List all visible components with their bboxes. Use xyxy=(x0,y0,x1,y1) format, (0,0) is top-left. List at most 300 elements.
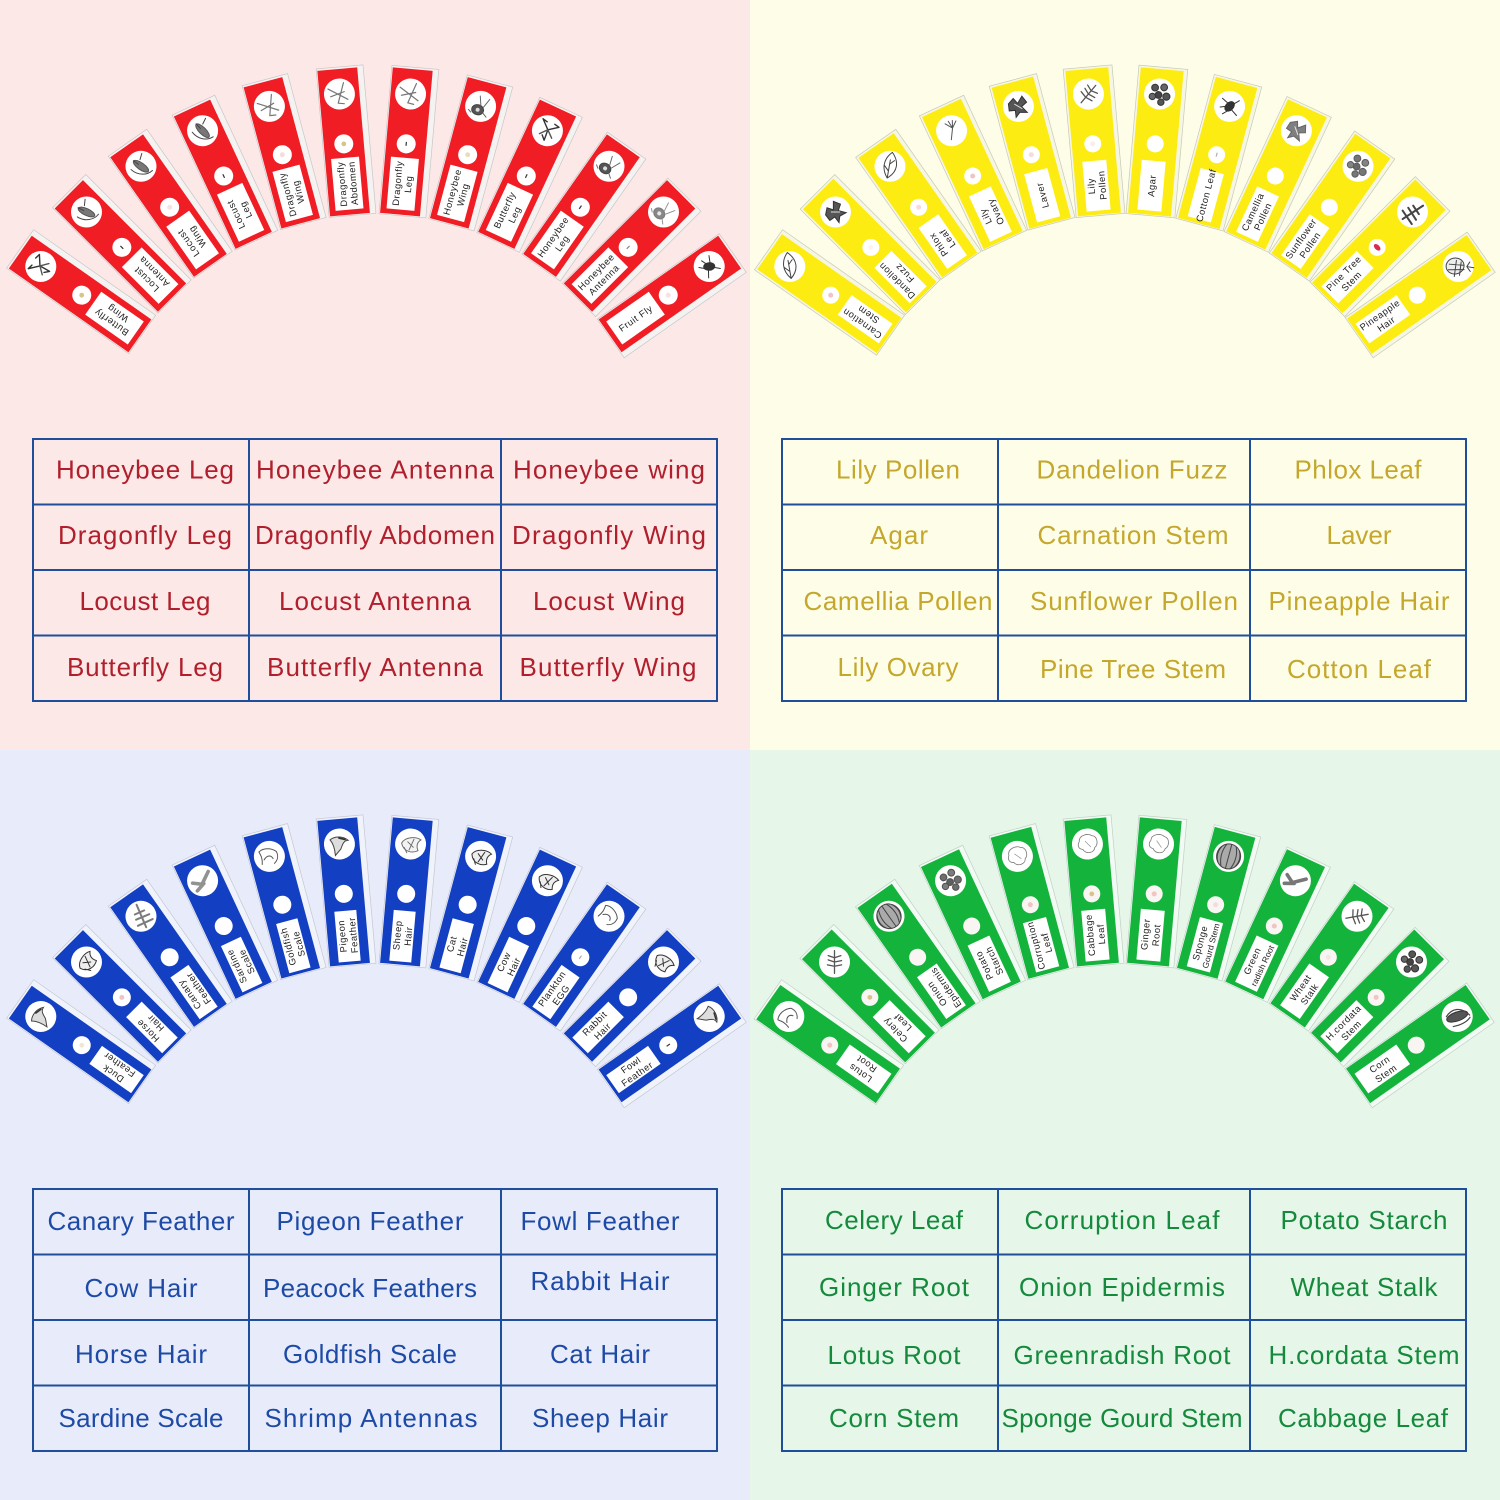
label xyxy=(1323,1002,1371,1050)
specimen xyxy=(579,206,581,209)
slide: Sponge Gourd Stem xyxy=(1176,825,1261,981)
slide: Butterfly Wing xyxy=(7,230,156,354)
table: plant specimens xyxy=(782,439,1466,701)
label: radish Root xyxy=(1249,943,1276,988)
table: insect specimens: Dragonfly Abdomen xyxy=(255,520,495,550)
table: insect specimens: Butterfly Leg xyxy=(67,652,223,682)
label xyxy=(1283,216,1328,267)
table: plant specimens: Carnation Stem xyxy=(1038,520,1228,550)
label xyxy=(1287,972,1322,1009)
label: Camellia xyxy=(1239,191,1266,233)
slide: Canary Feather xyxy=(108,879,232,1028)
slide: Laver xyxy=(989,74,1075,230)
label: Feather xyxy=(619,1059,655,1089)
label: Locust xyxy=(175,227,201,259)
panel: animals (blue) xyxy=(0,750,750,1500)
specimen xyxy=(867,244,874,251)
icon: radish xyxy=(1283,871,1306,891)
label: Wing xyxy=(186,224,208,250)
label: Pollen xyxy=(1251,201,1274,232)
label: Corn xyxy=(1367,1053,1392,1075)
label xyxy=(390,160,416,207)
label: Leaf xyxy=(892,1011,914,1034)
table: animal specimens: Cow Hair xyxy=(84,1273,198,1303)
label xyxy=(973,945,1005,982)
label: Honeybee xyxy=(441,168,463,216)
slide: Agar xyxy=(1126,65,1188,218)
specimen xyxy=(969,173,976,179)
icon: honeybee xyxy=(468,94,491,117)
slide: Duck Feather xyxy=(7,980,156,1104)
table: plant specimens: Sunflower Pollen xyxy=(1030,586,1238,616)
table: vegetable specimens: Onion Epidermis xyxy=(1019,1272,1225,1302)
panel: plants (yellow) xyxy=(750,0,1500,750)
specimen xyxy=(78,292,85,299)
slide: Sheep Hair xyxy=(379,815,439,968)
table: plant specimens: Lily Pollen xyxy=(836,454,960,484)
table: plant specimens: Phlox Leaf xyxy=(1294,454,1422,484)
label: Butterfly xyxy=(491,190,518,230)
slide: Wheat Stalk xyxy=(1269,882,1394,1031)
slide: Fowl Feather xyxy=(597,984,746,1108)
table: vegetable specimens: Sponge Gourd Stem xyxy=(1002,1403,1242,1433)
slide: Cabbage Leaf xyxy=(1063,815,1124,968)
table: animal specimens: Sardine Scale xyxy=(58,1403,224,1433)
label: Pollen xyxy=(1095,170,1109,200)
icon: wheat xyxy=(1346,904,1370,928)
table: insect specimens xyxy=(33,439,717,701)
icon: dragonfly xyxy=(399,82,419,105)
slide: Lily Ovary xyxy=(919,95,1027,251)
label xyxy=(92,298,137,338)
slide: Cotton Leaf xyxy=(1176,74,1262,231)
slide: Lily Pollen xyxy=(1063,65,1125,218)
label: Stalk xyxy=(1298,981,1321,1007)
slide: Cow Hair xyxy=(477,847,582,1002)
specimen xyxy=(118,994,125,1001)
label: Cabbage xyxy=(1083,914,1097,957)
label xyxy=(1357,297,1408,342)
table: plant specimens: Lily Ovary xyxy=(838,652,958,682)
icon: duck xyxy=(30,1005,55,1030)
specimen xyxy=(465,152,471,158)
slide: Onion Epidermis xyxy=(855,879,980,1029)
specimen xyxy=(223,174,225,178)
table: animal specimens: Canary Feather xyxy=(48,1206,235,1236)
table: insect specimens: Locust Wing xyxy=(533,586,685,616)
label: Cow xyxy=(494,950,513,973)
label xyxy=(390,920,415,952)
label: Sheep xyxy=(390,920,404,951)
label: Gourd Stem xyxy=(1200,922,1222,969)
specimen xyxy=(341,141,346,146)
table: insect specimens: Honeybee wing xyxy=(513,454,705,484)
label: Sardine xyxy=(224,948,249,985)
specimen xyxy=(1090,141,1096,147)
label: Honeybee xyxy=(535,214,571,259)
icon: corn xyxy=(1443,1004,1472,1031)
label: Dragonfly xyxy=(334,161,349,207)
table: vegetable specimens: Celery Leaf xyxy=(825,1205,964,1235)
table: plant specimens: Pine Tree Stem xyxy=(1040,654,1226,684)
slide: Pigeon Feather xyxy=(316,815,376,967)
label: Antenna xyxy=(586,262,622,297)
specimen xyxy=(1216,153,1217,157)
icon: carnation xyxy=(776,253,802,278)
label xyxy=(975,197,1006,231)
table: vegetable specimens: Greenradish Root xyxy=(1014,1340,1231,1370)
label: Pigeon xyxy=(335,920,349,953)
table: plant specimens: Laver xyxy=(1326,520,1392,550)
icon: goldfish xyxy=(259,846,279,866)
icon: sheep xyxy=(401,837,421,854)
slide: Honeybee Antenna xyxy=(562,178,701,317)
label xyxy=(880,1008,917,1045)
label: Hair xyxy=(1375,314,1397,334)
table: plant specimens: Cotton Leaf xyxy=(1287,654,1432,684)
label: Root xyxy=(1150,924,1163,947)
label xyxy=(175,221,210,259)
icon: dragonfly xyxy=(328,82,348,105)
specimen xyxy=(665,292,672,299)
icon: camellia xyxy=(1283,118,1308,144)
table: insect specimens: Locust Antenna xyxy=(279,586,472,616)
specimen xyxy=(826,1042,833,1049)
icon: leaf xyxy=(1006,845,1029,867)
label: Potato xyxy=(973,949,995,982)
slide: Dragonfly Leg xyxy=(379,65,439,218)
label: Fruit Fly xyxy=(616,302,655,334)
label: Leg xyxy=(552,233,571,253)
table: vegetable specimens: Lotus Root xyxy=(828,1340,961,1370)
icon: phlox xyxy=(877,152,903,178)
specimen xyxy=(1373,243,1382,252)
label: Lotus xyxy=(846,1061,874,1085)
icon: pineapple xyxy=(1439,249,1474,283)
table: insect specimens: Butterfly Wing xyxy=(520,652,696,682)
label: Stem xyxy=(1339,1018,1363,1043)
specimen xyxy=(166,204,173,211)
label xyxy=(134,1009,169,1045)
table: insect specimens: Honeybee Antenna xyxy=(256,454,495,484)
table: plant specimens: Pineapple Hair xyxy=(1268,586,1450,616)
panel: insects (red) xyxy=(0,0,750,750)
label: Plankton xyxy=(536,969,568,1008)
label xyxy=(491,190,528,235)
label xyxy=(1083,913,1108,957)
icon: honeybee xyxy=(595,152,621,178)
icon: ginger xyxy=(1149,834,1169,854)
slide: Honeybee Leg xyxy=(522,132,646,281)
icon: horse xyxy=(75,950,100,975)
table: animal specimens: Goldfish Scale xyxy=(283,1339,457,1369)
label xyxy=(1324,253,1371,301)
label xyxy=(224,943,259,985)
label xyxy=(1138,918,1163,951)
label: Leaf xyxy=(1094,924,1107,945)
slide: Carnation Stem xyxy=(754,230,905,355)
label: Antenna xyxy=(136,254,172,289)
slide: Dragonfly Abdomen xyxy=(316,65,376,217)
label: Corruption xyxy=(1024,921,1047,971)
label xyxy=(1239,191,1276,237)
label xyxy=(335,917,360,955)
label: Horse xyxy=(134,1017,161,1045)
icon: potato xyxy=(937,867,965,895)
label xyxy=(1188,919,1222,969)
label xyxy=(919,965,964,1016)
table: insect specimens: Dragonfly Leg xyxy=(58,520,232,550)
label xyxy=(1366,1053,1399,1085)
slide: Locust Leg xyxy=(172,95,278,250)
icon: fowl xyxy=(695,1005,720,1030)
label: Butterfly xyxy=(92,307,131,338)
table: animal specimens: Pigeon Feather xyxy=(276,1206,464,1236)
label: Ginger xyxy=(1138,918,1152,950)
slide: Ginger Root xyxy=(1126,815,1187,968)
icon: rabbit xyxy=(651,951,675,975)
panel: vegetables (green) xyxy=(750,750,1500,1500)
slide fan: vegetables xyxy=(754,815,1494,1108)
label: Lily xyxy=(1085,178,1097,195)
slide: Goldfish Scale xyxy=(242,824,326,980)
specimen xyxy=(1373,994,1380,1001)
label: Scale xyxy=(236,948,257,976)
icon: dandelion xyxy=(822,199,849,226)
label: Green xyxy=(1241,945,1263,976)
label: Goldfish xyxy=(278,927,298,967)
specimen xyxy=(1271,923,1278,929)
table: vegetable specimens: Cabbage Leaf xyxy=(1278,1403,1449,1433)
specimen xyxy=(866,994,873,1001)
table: animal specimens: Shrimp Antennas xyxy=(264,1403,478,1433)
label: Hair xyxy=(145,1012,166,1034)
label: Phlox xyxy=(926,231,950,259)
slide: Horse Hair xyxy=(53,925,191,1063)
slide: Sardine Scale xyxy=(172,845,278,1000)
slide: Locust Wing xyxy=(108,129,232,278)
table: plant specimens: Camellia Pollen xyxy=(804,586,992,616)
slide: Pineapple Hair xyxy=(1345,232,1495,358)
slide fan: animals xyxy=(7,815,746,1108)
icon: cotton xyxy=(1219,96,1240,117)
icon: butterfly xyxy=(535,119,559,144)
slide: Locust Antenna xyxy=(53,175,191,313)
icon: celery xyxy=(822,949,847,973)
label: Celery xyxy=(880,1016,910,1045)
table: vegetable specimens: H.cordata Stem xyxy=(1268,1340,1460,1370)
slide: Sunflower Pollen xyxy=(1269,131,1395,281)
label: Wheat xyxy=(1287,972,1313,1003)
slide: Phlox Leaf xyxy=(856,129,981,279)
label: Abdomen xyxy=(345,161,360,206)
slide: Green radish Root xyxy=(1224,847,1330,1002)
label xyxy=(494,950,523,978)
table: vegetable specimens: Wheat Stalk xyxy=(1290,1272,1438,1302)
table: insect specimens: Honeybee Leg xyxy=(56,454,234,484)
table: vegetable specimens: Corruption Leaf xyxy=(1024,1205,1220,1235)
icon: h.cordata xyxy=(1396,947,1426,977)
label xyxy=(441,168,474,219)
label: H.cordata xyxy=(1323,1002,1363,1042)
label: Dandelion xyxy=(876,260,917,302)
icon: locust xyxy=(127,154,153,180)
slide: Lotus Root xyxy=(754,980,904,1104)
table: insect specimens: Locust Leg xyxy=(80,586,210,616)
slide: Corn Stem xyxy=(1345,983,1494,1108)
slide fan: plants xyxy=(754,65,1495,358)
label: Canary xyxy=(175,978,203,1012)
label: Dragonfly xyxy=(390,160,405,206)
icon: cow xyxy=(535,871,559,893)
label: Fowl xyxy=(619,1054,643,1076)
label xyxy=(174,971,213,1013)
slide: H.cordata Stem xyxy=(1310,927,1449,1067)
icon: onion xyxy=(872,899,906,933)
slide: Butterfly Leg xyxy=(477,97,582,252)
label xyxy=(276,169,309,218)
specimen xyxy=(120,246,123,249)
label: Sunflower xyxy=(1283,216,1319,261)
label: Hair xyxy=(454,936,470,957)
slide: Celery Leaf xyxy=(800,925,939,1064)
label: Scale xyxy=(290,930,307,958)
table: plant specimens: Dandelion Fuzz xyxy=(1036,454,1228,484)
label: Leaf xyxy=(937,227,958,250)
label: Pine Tree xyxy=(1324,253,1363,293)
label: Root xyxy=(854,1053,879,1075)
label: Ovary xyxy=(985,197,1006,227)
slide: Dandelion Fuzz xyxy=(800,175,940,315)
specimen xyxy=(405,142,407,146)
label: Cotton Leaf xyxy=(1193,168,1218,223)
icon: honeybee xyxy=(649,197,676,224)
table: vegetable specimens: Potato Starch xyxy=(1280,1205,1448,1235)
label xyxy=(1084,170,1109,201)
icon: cat xyxy=(470,848,492,868)
slide: Dragonfly Wing xyxy=(242,74,326,230)
icon: sardine xyxy=(191,871,214,891)
icon: agar xyxy=(1148,83,1171,106)
label: Onion xyxy=(924,979,949,1009)
table: insect specimens: Dragonfly Wing xyxy=(512,520,706,550)
label xyxy=(613,1050,655,1089)
icon: locust xyxy=(72,199,99,226)
specimen xyxy=(1325,954,1332,961)
label: Fuzz xyxy=(893,261,916,285)
label: Epidermis xyxy=(928,965,964,1010)
slide: Rabbit Hair xyxy=(562,928,701,1067)
specimen xyxy=(627,246,630,249)
icon: cabbage xyxy=(1077,834,1098,853)
specimen xyxy=(1027,902,1033,908)
table: animal specimens xyxy=(33,1189,717,1451)
table: animal specimens: Fowl Feather xyxy=(520,1206,680,1236)
label: Hair xyxy=(402,926,414,946)
label: Wing xyxy=(290,179,306,205)
label: Stem xyxy=(855,303,881,326)
label: Wing xyxy=(105,302,130,325)
label: Feather xyxy=(101,1050,137,1080)
label: Hair xyxy=(504,955,523,978)
table: animal specimens: Sheep Hair xyxy=(532,1403,668,1433)
table: vegetable specimens: Corn Stem xyxy=(829,1403,959,1433)
label xyxy=(444,933,470,957)
table: animal specimens: Horse Hair xyxy=(75,1339,207,1369)
label: Starch xyxy=(983,945,1005,977)
icon: pine tree xyxy=(1398,198,1427,226)
label: Leg xyxy=(237,200,254,220)
specimen xyxy=(1028,152,1034,158)
icon: laver xyxy=(1006,95,1030,119)
label: Honeybee xyxy=(575,251,617,292)
label: Sponge xyxy=(1190,924,1210,962)
table: animal specimens: Cat Hair xyxy=(550,1339,650,1369)
table: animal specimens: Peacock Feathers xyxy=(263,1273,477,1303)
label: Hair xyxy=(592,1020,613,1042)
label: EGG xyxy=(550,982,572,1007)
icon: lily flower xyxy=(1080,84,1098,103)
label xyxy=(1238,938,1276,988)
label: Locust xyxy=(131,265,161,294)
label xyxy=(926,225,959,259)
label: Leg xyxy=(402,175,414,193)
table: vegetable specimens: Ginger Root xyxy=(819,1272,970,1302)
slide: Cat Hair xyxy=(429,825,513,981)
specimen xyxy=(1089,891,1094,896)
label xyxy=(536,969,577,1015)
label xyxy=(334,160,360,207)
label xyxy=(128,254,172,297)
slide: Fruit Fly xyxy=(597,234,746,358)
specimen xyxy=(78,1042,85,1049)
label: Feather xyxy=(346,917,360,954)
label: Stem xyxy=(1373,1062,1399,1085)
label: Leaf xyxy=(1038,932,1054,954)
label: Laver xyxy=(1034,181,1051,209)
label: Duck xyxy=(100,1062,126,1085)
label xyxy=(95,1050,137,1089)
specimen xyxy=(1151,891,1157,897)
table: insect specimens: Butterfly Antenna xyxy=(267,652,484,682)
label: Lily xyxy=(977,207,994,226)
table: animal specimens: Rabbit Hair xyxy=(530,1266,670,1296)
table: plant specimens: Agar xyxy=(870,520,928,550)
label: Pollen xyxy=(1297,230,1323,260)
slide: Plankton EGG xyxy=(522,882,646,1031)
label: Agar xyxy=(1145,174,1158,197)
icon: plankton xyxy=(597,904,621,928)
label: Locust xyxy=(224,198,247,231)
label xyxy=(580,1009,617,1046)
icon: butterfly xyxy=(28,254,54,280)
specimen xyxy=(915,204,922,211)
table: vegetable specimens xyxy=(782,1189,1466,1451)
icon: locust xyxy=(189,118,214,144)
icon: fruit fly xyxy=(697,255,721,279)
icon: canary xyxy=(128,902,154,931)
label: Rabbit xyxy=(580,1009,609,1038)
label: Stem xyxy=(1339,269,1364,293)
icon: dragonfly xyxy=(256,94,280,119)
label: Leg xyxy=(506,204,523,225)
label: Feather xyxy=(183,971,213,1006)
specimen xyxy=(827,292,834,299)
label: Pineapple xyxy=(1357,297,1402,333)
slide: Potato Starch xyxy=(919,845,1026,1001)
label: Carnation xyxy=(840,306,884,341)
label: Dragonfly xyxy=(276,172,299,218)
